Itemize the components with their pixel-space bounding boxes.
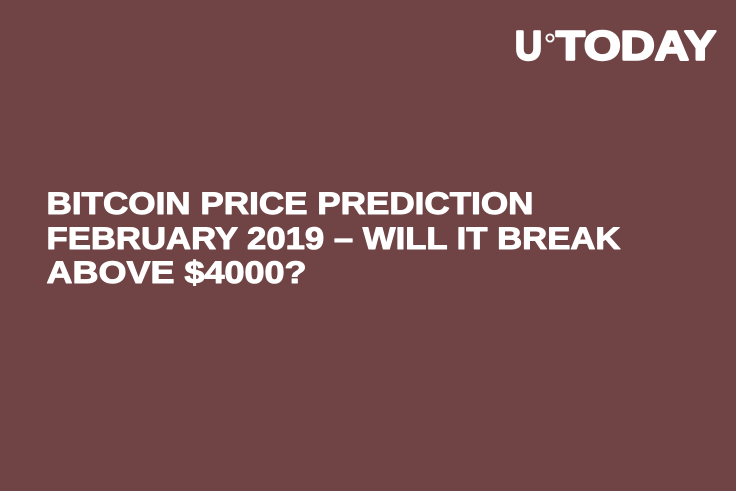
title [46,185,621,290]
logo: U.Today [515,22,716,68]
logo: U.Today: U [515,22,542,68]
title: BITCOIN PRICE PREDICTION [46,185,534,221]
logo: U.Today: TODAY [556,22,716,68]
title: ABOVE $4000? [46,254,306,290]
title: FEBRUARY 2019 – WILL IT BREAK [46,220,621,256]
